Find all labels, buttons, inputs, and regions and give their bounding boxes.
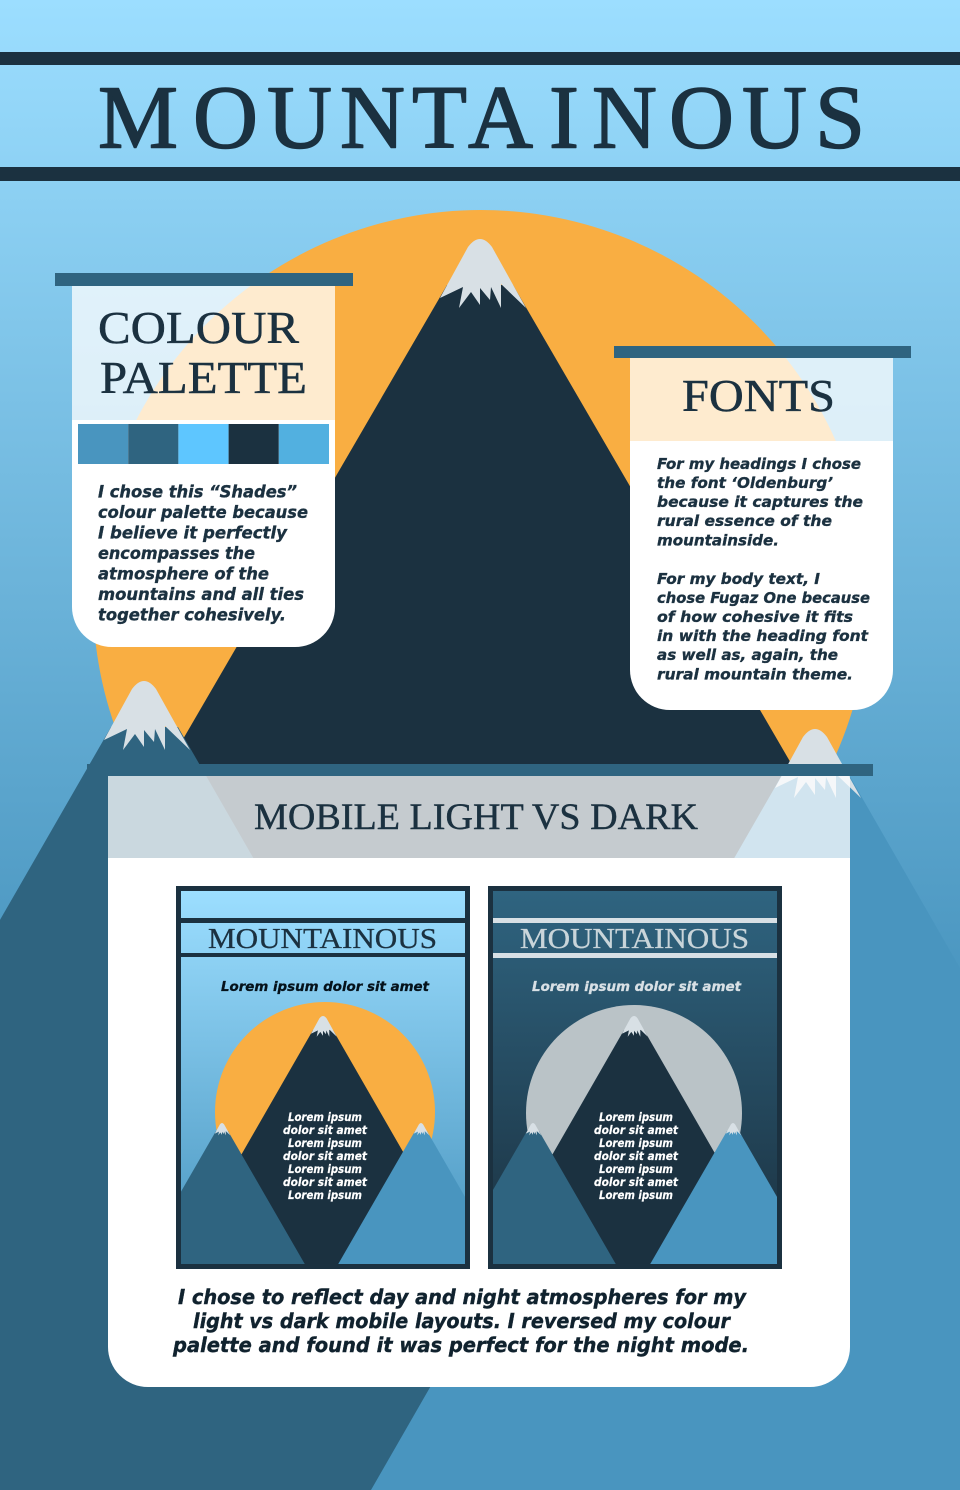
heading: mobile light vs dark: MOBILE LIGHT VS DARK	[254, 797, 698, 838]
mobile mockup: light: Lorem ipsum	[288, 1188, 362, 1202]
right mountain	[371, 729, 960, 1490]
central mountain	[0, 239, 960, 1300]
mobile mockup: light: MOUNTAINOUS	[208, 923, 437, 955]
text: fonts explanation: chose Fugaz One because	[657, 589, 870, 607]
mobile mockup: dark: MOUNTAINOUS	[520, 923, 749, 955]
title banner	[0, 52, 960, 181]
mobile mockup: light: Lorem ipsum	[288, 1110, 362, 1124]
text: fonts explanation: the font ‘Oldenburg’	[657, 474, 833, 492]
text: palette explanation: encompasses the	[98, 544, 255, 563]
mobile mockup: light: dolor sit amet	[283, 1149, 367, 1163]
text: palette explanation: mountains and all ties	[98, 585, 304, 604]
title banner: MOUNTAINOUS	[98, 68, 865, 168]
text: palette explanation: together cohesively.	[98, 606, 286, 624]
text: day and night explanation: I chose to reflect day and night atmospheres for my	[178, 1285, 747, 1309]
text: fonts explanation: of how cohesive it fits	[657, 608, 853, 626]
text: fonts explanation: mountainside.	[657, 532, 779, 550]
text: fonts explanation: because it captures the	[657, 493, 863, 511]
mobile mockup: light: Lorem ipsum dolor sit amet	[221, 979, 430, 995]
mobile mockup: dark: Lorem ipsum	[599, 1136, 673, 1150]
mobile mockup: light: Lorem ipsum	[288, 1162, 362, 1176]
text: day and night explanation: palette and found it was perfect for the night mode.	[172, 1333, 749, 1357]
text: palette explanation	[98, 482, 308, 624]
mobile mockup: light: Lorem ipsum	[288, 1136, 362, 1150]
text: fonts explanation: For my body text, I	[657, 570, 820, 588]
left mountain	[0, 681, 617, 1490]
heading: colour palette: PALETTE	[100, 352, 307, 403]
mobile mockup: dark	[488, 886, 782, 1269]
text: palette explanation: atmosphere of the	[98, 564, 269, 584]
mobile mockup: dark: dolor sit amet	[594, 1123, 678, 1137]
heading: fonts: FONTS	[682, 370, 835, 421]
text: day and night explanation: light vs dark mobile layouts. I reversed my colour	[193, 1309, 731, 1333]
mobile mockup: light: dolor sit amet	[283, 1123, 367, 1137]
mobile mockup: dark: dolor sit amet	[594, 1175, 678, 1189]
mobile mockup: light: dolor sit amet	[283, 1175, 367, 1189]
text: fonts explanation: as well as, again, the	[657, 646, 838, 664]
mobile mockup: dark: dolor sit amet	[594, 1149, 678, 1163]
text: palette explanation: I chose this “Shades”	[98, 482, 297, 502]
text: day and night explanation	[172, 1285, 749, 1357]
panel: mobile light vs dark	[87, 764, 873, 1387]
mobile mockup: dark: Lorem ipsum dolor sit amet	[532, 979, 742, 995]
text: fonts explanation: in with the heading font	[657, 627, 869, 645]
text: palette explanation: I believe it perfectly	[98, 524, 288, 542]
mobile mockup: dark: Lorem ipsum	[599, 1162, 673, 1176]
sun	[93, 210, 869, 986]
mobile mockup: dark: Lorem ipsum	[599, 1188, 673, 1202]
text: fonts explanation: rural mountain theme.	[657, 666, 853, 684]
panel: colour palette	[55, 273, 353, 647]
colour swatches	[78, 424, 329, 464]
text: fonts explanation	[657, 455, 870, 684]
mobile mockup: light	[176, 886, 470, 1269]
heading: colour palette: COLOUR	[98, 302, 299, 353]
panel: fonts	[614, 346, 911, 710]
text: fonts explanation: rural essence of the	[657, 512, 832, 530]
text: palette explanation: colour palette because	[98, 503, 308, 522]
mobile mockup: dark: Lorem ipsum	[599, 1110, 673, 1124]
text: fonts explanation: For my headings I chose	[657, 455, 861, 473]
heading: colour palette	[98, 302, 307, 403]
